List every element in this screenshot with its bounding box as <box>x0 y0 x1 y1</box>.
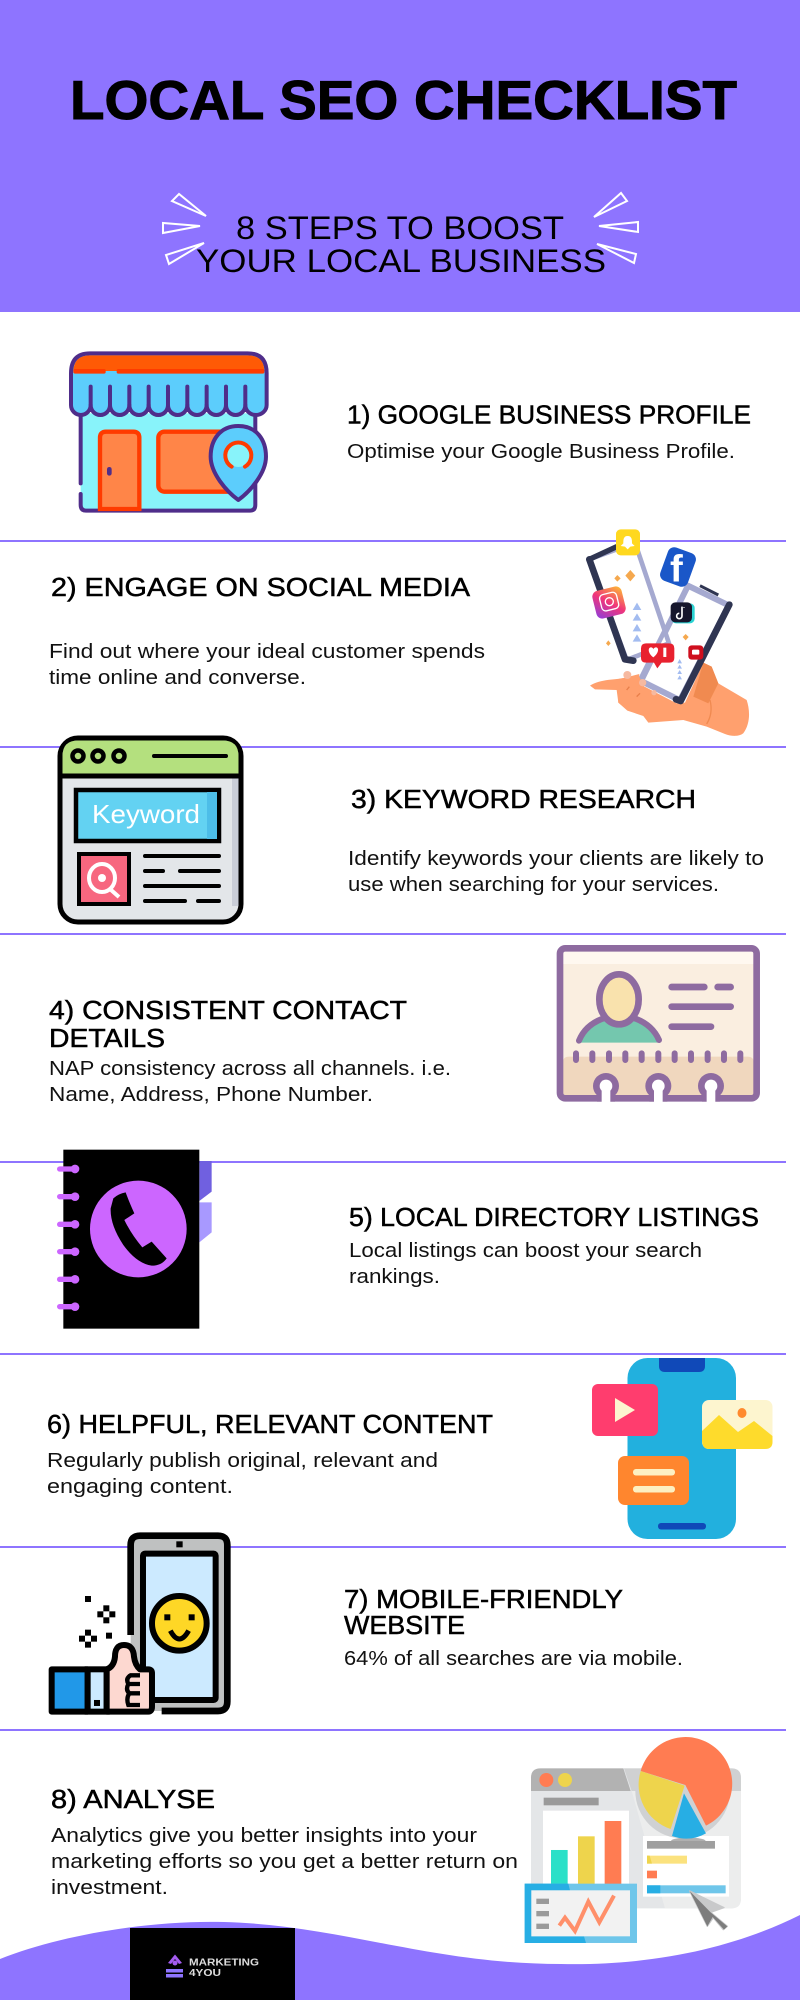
panel: step 8 <box>51 1737 741 1943</box>
panel: step 5 <box>57 1150 759 1329</box>
icon: phone book <box>57 1150 212 1329</box>
icon: mobile phone with smiley and thumbs up <box>52 1536 227 1712</box>
heading: step 1: 1) GOOGLE BUSINESS PROFILE <box>347 400 751 430</box>
subtitle <box>196 210 606 279</box>
panel: step 7 <box>52 1536 683 1712</box>
text: step 3 <box>348 848 764 896</box>
text: step 3: Identify keywords your clients are likely to <box>348 848 764 870</box>
text: step 8: marketing efforts so you get a better return on <box>51 1851 518 1873</box>
logo text: 4YOU <box>189 1967 221 1979</box>
text: step 5: Local listings can boost your search <box>349 1240 702 1262</box>
text: step 8 <box>51 1825 518 1899</box>
text: step 7: 64% of all searches are via mobile. <box>344 1648 683 1670</box>
panel: step 3 <box>60 738 764 922</box>
text: step 5 <box>349 1240 702 1288</box>
icon: burst rays <box>163 193 638 264</box>
subtitle: YOUR LOCAL BUSINESS <box>196 243 606 279</box>
heading: step 7: WEBSITE <box>344 1610 465 1640</box>
icon: keyword browser window: Keyword <box>92 799 200 829</box>
heading: step 7 <box>344 1584 623 1640</box>
panel: step 4 <box>49 948 757 1106</box>
heading: step 7: 7) MOBILE-FRIENDLY <box>344 1584 623 1614</box>
text: step 8: investment. <box>51 1877 168 1899</box>
text: step 2: Find out where your ideal customer spends <box>49 641 485 663</box>
text: step 6: engaging content. <box>47 1476 233 1498</box>
icon: contact ID card <box>560 948 757 1103</box>
logo block <box>130 1928 295 2000</box>
text: step 6: Regularly publish original, relevant and <box>47 1450 438 1472</box>
icon: keyword browser window <box>60 738 241 922</box>
text: step 1: Optimise your Google Business Profile. <box>347 441 735 463</box>
title: LOCAL SEO CHECKLIST <box>70 69 737 131</box>
heading: step 4: DETAILS <box>49 1023 165 1053</box>
footer wave <box>0 1915 800 2000</box>
subtitle: 8 STEPS TO BOOST <box>236 210 564 246</box>
text: step 5: rankings. <box>349 1266 440 1288</box>
text: step 4 <box>49 1058 451 1106</box>
heading: step 5: 5) LOCAL DIRECTORY LISTINGS <box>349 1202 759 1232</box>
panel: step 2 <box>49 529 749 736</box>
text: step 2 <box>49 641 485 689</box>
panel: step 6 <box>47 1358 772 1539</box>
text: step 8: Analytics give you better insights into your <box>51 1825 477 1847</box>
heading: step 4: 4) CONSISTENT CONTACT <box>49 995 407 1025</box>
icon: hand holding phones with social apps <box>589 529 749 736</box>
heading: step 8: 8) ANALYSE <box>51 1784 215 1814</box>
text: step 3: use when searching for your services. <box>348 874 719 896</box>
logo text <box>189 1956 259 1979</box>
header banner <box>0 0 800 312</box>
text: step 2: time online and converse. <box>49 667 306 689</box>
panel: step 1 <box>71 353 751 511</box>
icon: shop with map pin <box>71 353 267 511</box>
icon: analytics dashboard <box>525 1737 741 1943</box>
icon: phone with content cards <box>592 1358 772 1539</box>
text: step 4: NAP consistency across all channels. i.e. <box>49 1058 451 1080</box>
icon: logo mark <box>166 1954 183 1978</box>
heading: step 4 <box>49 995 407 1053</box>
heading: step 2: 2) ENGAGE ON SOCIAL MEDIA <box>51 572 471 602</box>
icon: hand holding phones with social apps: f <box>670 548 683 591</box>
heading: step 3: 3) KEYWORD RESEARCH <box>351 784 696 814</box>
logo text: MARKETING <box>189 1956 259 1968</box>
text: step 6 <box>47 1450 438 1498</box>
text: step 4: Name, Address, Phone Number. <box>49 1084 373 1106</box>
heading: step 6: 6) HELPFUL, RELEVANT CONTENT <box>47 1409 493 1439</box>
